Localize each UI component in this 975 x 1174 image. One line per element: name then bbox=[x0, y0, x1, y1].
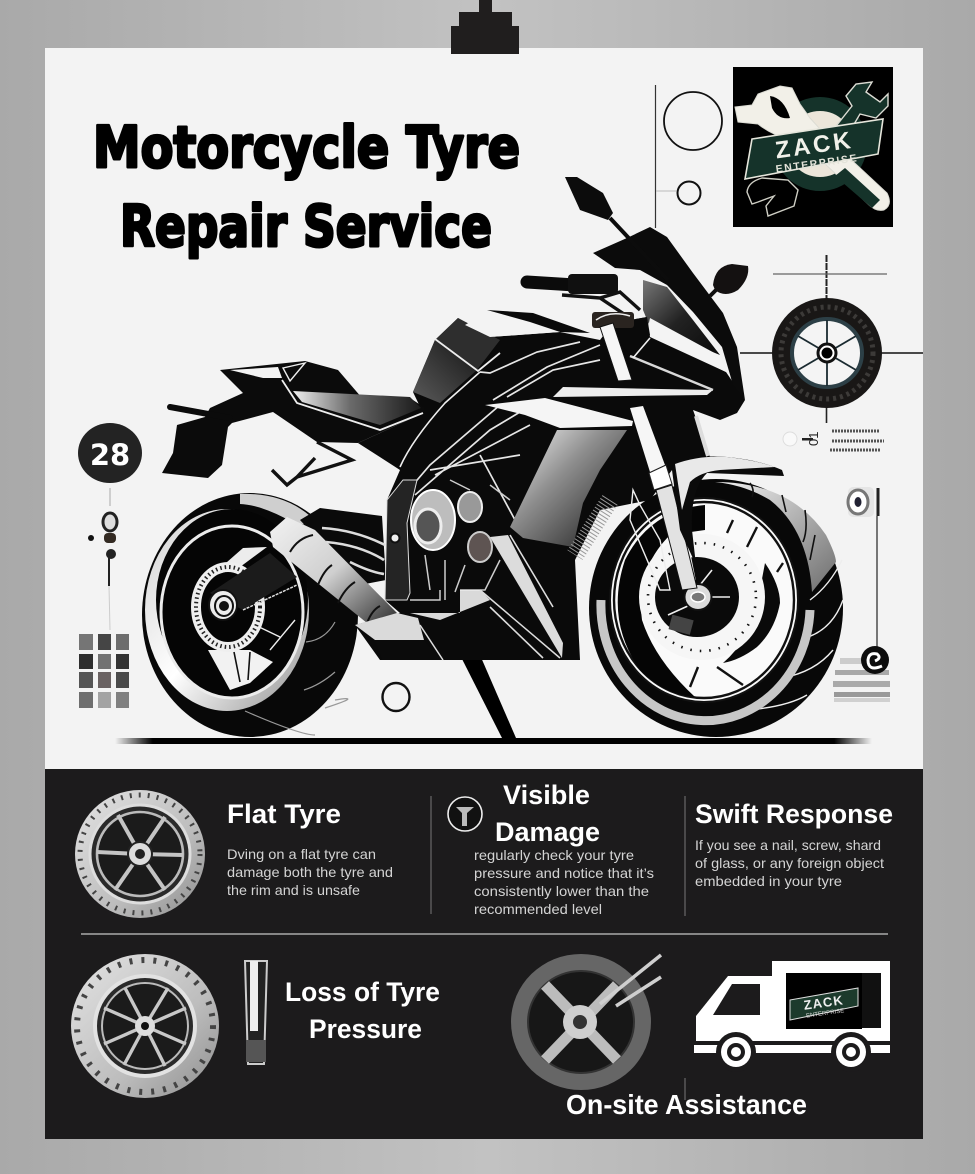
dark flame area behind exhaust bbox=[300, 508, 386, 585]
icon: pressure-loss wheel bbox=[71, 954, 219, 1098]
brake disc bbox=[639, 534, 765, 660]
diagram: small tyre with crosshairs bbox=[740, 255, 923, 423]
body white swoop lines bbox=[400, 342, 600, 520]
white wedge bbox=[485, 398, 633, 428]
heading: visible damage: Damage bbox=[495, 817, 600, 847]
text: visible damage bbox=[474, 847, 654, 917]
clamp patch bbox=[613, 317, 650, 355]
text: flat tyre: Dving on a flat tyre can bbox=[227, 846, 376, 862]
ratchet wrench bbox=[735, 86, 889, 210]
rear wheel white spoke areas bbox=[208, 650, 273, 690]
van logo: ZACK bbox=[803, 992, 845, 1013]
tank wing bbox=[487, 310, 590, 333]
right mirror bbox=[710, 264, 748, 296]
heading: loss of tyre pressure bbox=[285, 977, 440, 1044]
belly pan bbox=[355, 590, 560, 660]
grey lower fairing panel bbox=[510, 430, 627, 547]
left mirror bbox=[565, 177, 668, 280]
badge 28 bbox=[78, 423, 142, 483]
front fender bbox=[672, 456, 784, 565]
heading: loss of tyre pressure: Loss of Tyre bbox=[285, 977, 440, 1007]
seat bbox=[293, 391, 421, 425]
icon: flat tyre wheel bbox=[75, 790, 205, 918]
text: visible damage: pressure and notice that it’s bbox=[474, 865, 654, 881]
upper fork bbox=[600, 323, 632, 381]
section dividers bbox=[430, 796, 432, 914]
binder clip bbox=[451, 0, 519, 54]
lozenge highlight bbox=[553, 387, 713, 397]
helmet outline bbox=[747, 178, 798, 216]
spec label marks: 01 bbox=[806, 432, 821, 446]
frame and engine bbox=[385, 480, 510, 600]
title bbox=[93, 115, 520, 260]
open wrench bbox=[825, 82, 888, 148]
title: Motorcycle Tyre bbox=[93, 115, 520, 181]
icon: tyre lever tube bbox=[245, 961, 267, 1064]
title: Repair Service bbox=[120, 194, 492, 260]
motorcycle bbox=[142, 177, 843, 738]
lower fork tube bbox=[630, 406, 708, 590]
windscreen shell bbox=[593, 227, 745, 400]
icon: repair wheel with tool bbox=[511, 954, 661, 1090]
front wheel left crescent bbox=[618, 505, 705, 697]
logo: Zack Enterprise bbox=[733, 67, 893, 227]
spec label marks bbox=[783, 431, 884, 450]
text: flat tyre: the rim and is unsafe bbox=[227, 882, 360, 898]
text: visible damage: consistently lower than the bbox=[474, 883, 649, 899]
gauge icon and vertical rule bbox=[848, 487, 878, 650]
text: swift response bbox=[695, 837, 884, 889]
text: visible damage: recommended level bbox=[474, 901, 602, 917]
heading: loss of tyre pressure: Pressure bbox=[309, 1014, 422, 1044]
heading: on-site assistance: On-site Assistance bbox=[566, 1089, 807, 1120]
swatch grid bbox=[79, 634, 129, 708]
handlebar bbox=[527, 274, 640, 328]
logo: Zack Enterprise: ENTERPRISE bbox=[775, 152, 859, 176]
text: flat tyre: damage both the tyre and bbox=[227, 864, 393, 880]
bike stand stripe bbox=[460, 655, 516, 738]
icon: visible damage bbox=[448, 797, 482, 831]
dark info panel bbox=[45, 769, 923, 1139]
van logo: ENTERPRISE bbox=[806, 1008, 845, 1020]
heading: visible damage bbox=[495, 780, 600, 847]
rear wheel bbox=[142, 493, 358, 737]
swingarm bbox=[209, 553, 297, 620]
heading: swift response: Swift Response bbox=[695, 799, 893, 829]
ground line bbox=[115, 738, 872, 744]
text: swift response: embedded in your tyre bbox=[695, 873, 842, 889]
spiral icon and grey stripes bbox=[833, 646, 890, 702]
white fairing stripes bbox=[490, 535, 563, 658]
text: flat tyre bbox=[227, 846, 393, 898]
logo banner bbox=[745, 119, 883, 179]
small ring under bike bbox=[382, 683, 410, 711]
main body dark mass bbox=[355, 317, 745, 660]
left probe marks bbox=[88, 488, 117, 630]
front wheel bbox=[589, 479, 843, 737]
icon: service van bbox=[694, 961, 890, 1072]
kick stand bbox=[272, 442, 352, 485]
tank bbox=[413, 340, 477, 403]
heading: visible damage: Visible bbox=[503, 780, 590, 810]
exhaust pipe bbox=[270, 517, 397, 627]
tail and rear subframe bbox=[162, 361, 425, 478]
dark band around disc bbox=[723, 563, 780, 663]
blueprint circles bbox=[656, 85, 722, 228]
badge 28: 28 bbox=[90, 438, 130, 472]
van logo bbox=[786, 973, 862, 1029]
text: swift response: If you see a nail, screw, shard bbox=[695, 837, 881, 853]
text: visible damage: regularly check your tyre bbox=[474, 847, 634, 863]
text: swift response: of glass, or any foreign object bbox=[695, 855, 884, 871]
heading: flat tyre: Flat Tyre bbox=[227, 799, 341, 829]
logo: Zack Enterprise: ZACK bbox=[774, 127, 855, 164]
